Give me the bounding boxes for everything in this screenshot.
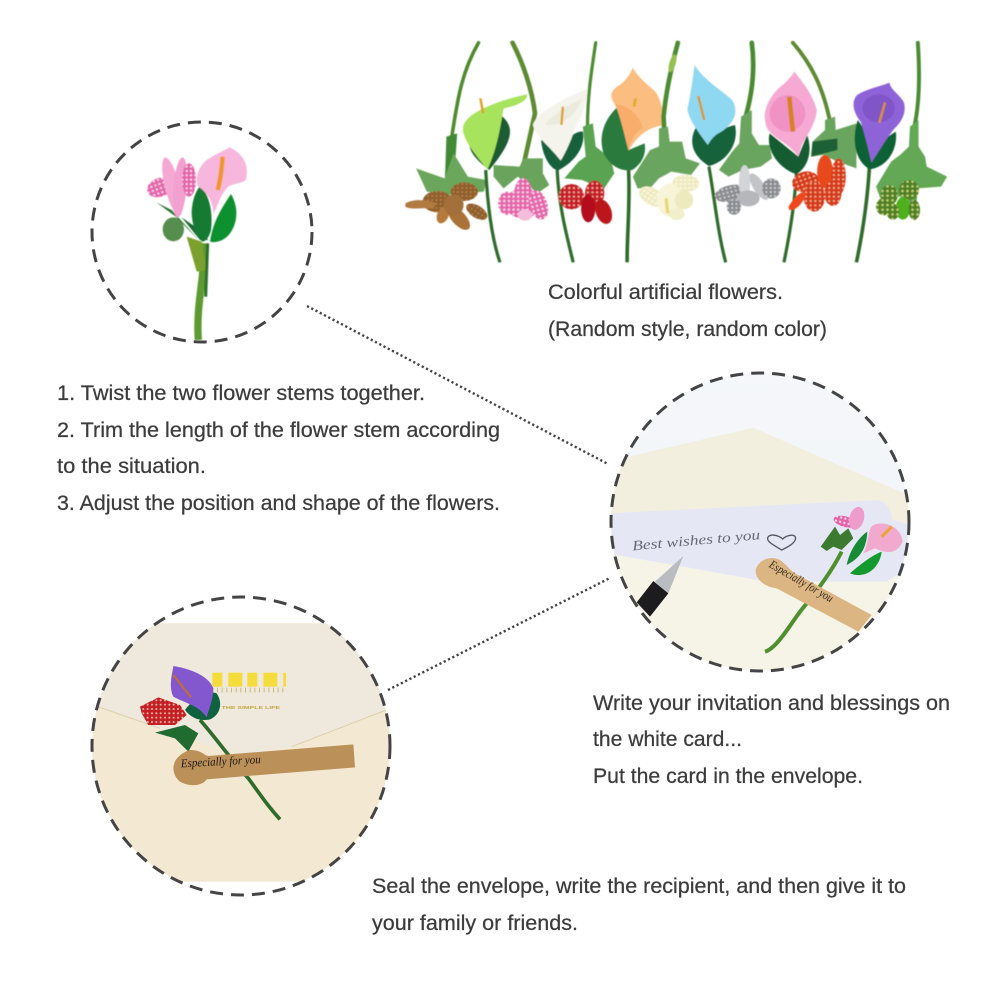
caption: write invitation: the white card... (593, 728, 742, 751)
kraft tag: Especially for you (766, 557, 836, 605)
stem (200, 720, 280, 819)
heart (768, 535, 796, 550)
caption: seal the envelope: your family or friends. (372, 912, 578, 935)
dotted connector: right circle to bottom circle (388, 578, 610, 690)
text block: numbered instructions: 1. Twist the two flower stems together. (57, 382, 425, 405)
flower 7: purple calla with green buds (854, 43, 947, 262)
purple calla (171, 666, 213, 717)
flower 4: blue calla with cream buds (633, 43, 736, 262)
leaves (155, 725, 198, 752)
flower 6: orange-red buds on pink stem (789, 43, 856, 212)
text block: numbered instructions: 3. Adjust the position and shape of the flowers. (57, 492, 500, 515)
caption: colorful flowers (548, 281, 827, 341)
flower 5: pink calla with silver buds (713, 43, 817, 262)
stem (765, 552, 842, 652)
text block: numbered instructions: to the situation. (57, 455, 206, 478)
flower 3: peach calla with red buds (559, 43, 663, 262)
dotted connector: top circle to right circle (307, 306, 608, 464)
kraft seal: Especially for you (180, 752, 261, 770)
dashed ring (92, 597, 390, 895)
caption: colorful flowers: (Random style, random color) (548, 318, 827, 341)
circle 3: sealed envelope photo (88, 597, 395, 895)
text block: numbered instructions: 2. Trim the length of the flower stem according (57, 419, 500, 442)
small flowers (821, 505, 903, 575)
caption: seal the envelope: Seal the envelope, write the recipient, and then give it to (372, 875, 906, 898)
caption: colorful flowers: Colorful artificial flowers. (548, 281, 783, 304)
dashed ring (92, 122, 312, 342)
gold logo: THE SIMPLE LIFE (222, 705, 281, 711)
caption: write invitation: Put the card in the envelope. (593, 765, 863, 788)
gold logo (212, 673, 286, 711)
circle 2: card and pen photo (607, 368, 913, 675)
flower 1: green calla with brown buds (405, 43, 527, 262)
text block: numbered instructions (57, 382, 500, 515)
red buds (140, 697, 187, 725)
twisted flower (144, 147, 247, 340)
kraft tag (756, 557, 872, 632)
circle 1: twisted flower detail (92, 122, 312, 342)
printed greeting: Best wishes to you (632, 528, 761, 554)
caption: seal the envelope (372, 875, 906, 935)
flower 2: white calla with pink buds (494, 43, 588, 262)
kraft seal (173, 744, 355, 785)
caption: write invitation: Write your invitation and blessings on (593, 692, 950, 715)
card photo (607, 368, 913, 675)
dashed ring (611, 373, 909, 671)
caption: write invitation (593, 692, 950, 788)
flower assortment photo (405, 43, 947, 262)
pen (637, 556, 683, 617)
envelope photo (88, 623, 395, 882)
